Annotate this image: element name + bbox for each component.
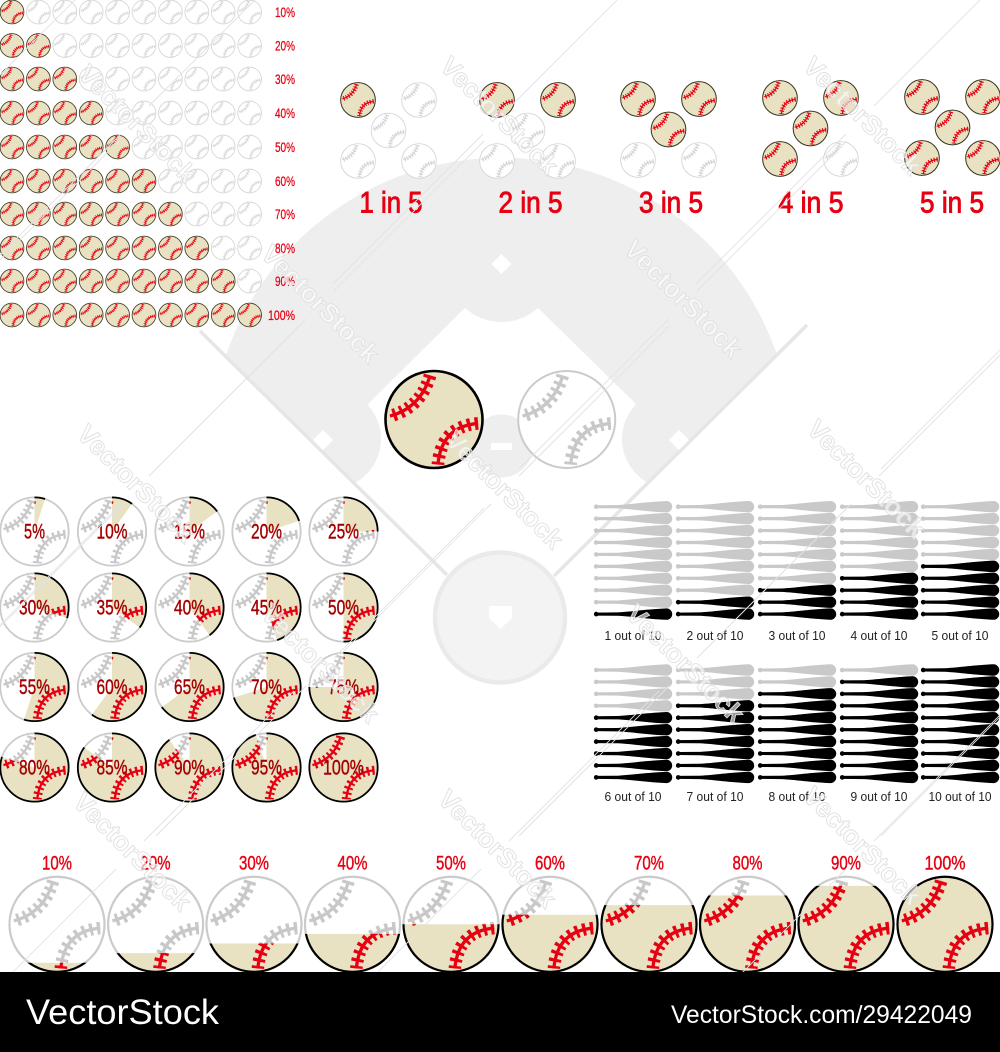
bats 1 out of 10 (594, 501, 672, 643)
watermark overlay: VectorStock (71, 419, 202, 549)
pie 90% (155, 733, 224, 802)
footer bar (0, 972, 1000, 1052)
fill 70% (601, 854, 697, 972)
watermark overlay: VectorStock (72, 59, 203, 189)
pie 45% (232, 573, 301, 642)
group 3 in 5 (621, 82, 716, 220)
bats 3 out of 10: 3 out of 10 (768, 628, 826, 643)
row 30% (0, 67, 295, 91)
bats 2 out of 10 (676, 501, 754, 643)
pie 100%: 100% (323, 756, 364, 780)
pie 75% (309, 653, 378, 721)
group 2 in 5: 2 in 5 (498, 187, 562, 220)
row 20% (0, 34, 295, 57)
bats 7 out of 10 (676, 664, 754, 804)
row 10%: 10% (275, 4, 295, 20)
watermark overlay: VectorStock (797, 51, 928, 181)
fill 50%: 50% (436, 853, 466, 874)
group 4 in 5: 4 in 5 (778, 187, 844, 220)
row 40%: 40% (275, 105, 295, 121)
row 80% (0, 236, 295, 260)
pie 85% (78, 733, 146, 802)
fill 80%: 80% (732, 853, 763, 874)
bats 5 out of 10: 5 out of 10 (932, 628, 988, 643)
pie 15%: 15% (174, 520, 205, 544)
pie 65%: 65% (174, 676, 205, 699)
pie 50%: 50% (328, 596, 359, 620)
fill 100%: 100% (924, 853, 966, 874)
pie 65% (155, 653, 224, 721)
bats 9 out of 10 (840, 664, 918, 804)
pie 5%: 5% (24, 520, 45, 544)
row 20%: 20% (275, 38, 295, 54)
fill 50% (403, 854, 499, 972)
pie 80% (0, 733, 69, 802)
panel: bat pictograms n out of 10 (594, 501, 999, 804)
panel: n in 5 baseball groups (341, 80, 1000, 220)
fill 10%: 10% (42, 853, 72, 874)
pie 35% (78, 573, 146, 642)
pie 90%: 90% (174, 756, 205, 780)
pie 20% (232, 497, 301, 566)
watermark overlay: VectorStock (620, 599, 751, 729)
bats 5 out of 10 (921, 501, 999, 643)
pie 10%: 10% (97, 520, 127, 544)
fill 90%: 90% (831, 853, 861, 874)
group 2 in 5 (480, 83, 575, 220)
watermark overlay: VectorStock (432, 784, 563, 914)
fill 90% (798, 854, 894, 972)
bats 10 out of 10 (921, 664, 999, 804)
fill 20% (108, 854, 203, 972)
pie 15% (155, 497, 224, 566)
pie 50% (309, 573, 378, 642)
watermark overlay: VectorStock (255, 239, 386, 369)
watermark overlay: VectorStock (434, 51, 565, 181)
bats 4 out of 10 (840, 501, 918, 643)
pie 95% (232, 733, 301, 802)
pie 20%: 20% (251, 520, 282, 544)
pie 5% (0, 497, 69, 566)
pie 80%: 80% (19, 756, 50, 780)
bats 6 out of 10 (594, 664, 672, 804)
watermark overlay: VectorStock (255, 599, 386, 729)
fill 80% (700, 854, 795, 972)
pie 55%: 55% (19, 676, 50, 699)
bats 8 out of 10: 8 out of 10 (768, 789, 826, 804)
panel: fill-level baseballs 10% to 100% (9, 854, 993, 972)
pie 60%: 60% (97, 676, 127, 699)
pie 55% (0, 653, 69, 721)
group 3 in 5: 3 in 5 (639, 187, 703, 220)
row 10% (0, 0, 295, 24)
panel: pie-filled baseballs 5% to 100% (0, 497, 378, 802)
bats 9 out of 10: 9 out of 10 (850, 789, 908, 804)
icon: large coloured baseball (385, 371, 483, 468)
pie 10% (78, 497, 146, 566)
watermark overlay: VectorStock (801, 414, 932, 544)
footer bar: VectorStock.com/29422049 (671, 1001, 972, 1029)
bats 2 out of 10: 2 out of 10 (686, 628, 744, 643)
row 60%: 60% (275, 173, 295, 189)
fill 20%: 20% (141, 853, 171, 874)
watermark overlay: VectorStock (439, 425, 570, 555)
fill 100% (897, 854, 993, 972)
bats 3 out of 10 (758, 501, 836, 643)
row 80%: 80% (275, 240, 295, 256)
pie 60% (78, 653, 146, 721)
bats 8 out of 10 (758, 664, 836, 804)
fill 40% (305, 854, 400, 972)
fill 40%: 40% (338, 853, 368, 874)
pie 25%: 25% (328, 520, 359, 544)
group 5 in 5 (905, 80, 1000, 220)
fill 30% (206, 854, 302, 972)
pie 70% (232, 653, 301, 721)
bats 4 out of 10: 4 out of 10 (850, 628, 908, 643)
panel: ten rows of baseballs with percent labels (0, 0, 295, 327)
fill 70%: 70% (634, 853, 664, 874)
pie 70%: 70% (251, 676, 282, 699)
row 90% (0, 269, 295, 293)
watermark overlay: VectorStock (797, 781, 928, 911)
row 100%: 100% (268, 307, 295, 323)
pie 35%: 35% (97, 596, 127, 620)
row 60% (0, 169, 295, 193)
watermark overlay: VectorStock (618, 234, 749, 364)
icon: large grey baseball (518, 371, 615, 468)
pie 75%: 75% (328, 676, 359, 699)
group 5 in 5: 5 in 5 (920, 187, 984, 220)
row 70%: 70% (275, 206, 295, 222)
row 90%: 90% (275, 273, 295, 289)
row 40% (0, 101, 295, 125)
bats 1 out of 10: 1 out of 10 (604, 628, 662, 643)
group 4 in 5 (763, 81, 858, 220)
row 30%: 30% (275, 71, 295, 87)
fill 60% (502, 854, 598, 972)
pie 95%: 95% (251, 756, 282, 780)
pie 25% (309, 497, 378, 566)
pie 30% (0, 573, 69, 642)
bats 6 out of 10: 6 out of 10 (604, 789, 662, 804)
fill 60%: 60% (535, 853, 565, 874)
watermark overlay: VectorStock (67, 787, 198, 917)
bats 7 out of 10: 7 out of 10 (686, 789, 744, 804)
pie 40% (155, 573, 224, 642)
bats 10 out of 10: 10 out of 10 (928, 789, 992, 804)
row 50%: 50% (275, 139, 295, 155)
group 1 in 5: 1 in 5 (360, 187, 422, 220)
footer bar: VectorStock (26, 993, 220, 1032)
group 1 in 5 (341, 83, 436, 220)
row 100% (0, 303, 295, 327)
pie 85%: 85% (97, 756, 127, 780)
fill 30%: 30% (239, 853, 269, 874)
row 50% (0, 135, 295, 159)
row 70% (0, 202, 295, 226)
pie 30%: 30% (19, 596, 50, 620)
fill 10% (9, 854, 105, 972)
background: baseball field (200, 158, 807, 682)
pie 40%: 40% (174, 596, 205, 620)
pie 100% (309, 733, 378, 802)
pie 45%: 45% (251, 596, 282, 620)
